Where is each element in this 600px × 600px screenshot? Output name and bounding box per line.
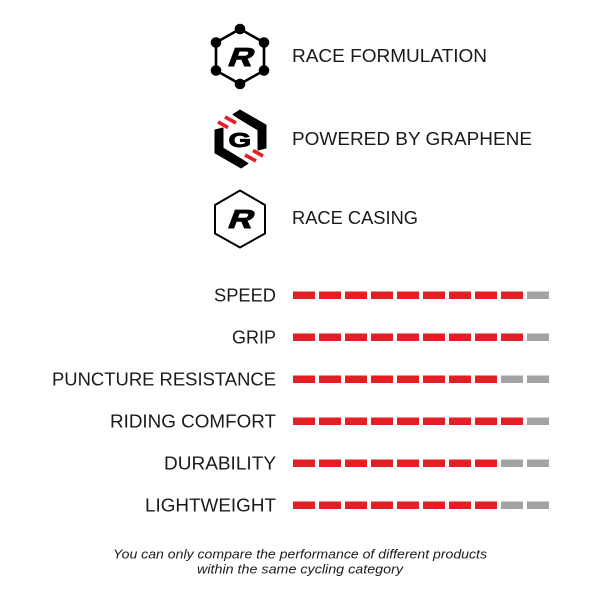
- rating row: speed: [214, 284, 549, 306]
- heading: race casing: RACE CASING: [292, 207, 418, 228]
- icon: race casing: [215, 190, 265, 248]
- icon: powered by graphene: [215, 110, 266, 168]
- rating row: lightweight: [145, 494, 549, 516]
- footnote: within the same cycling category: [197, 562, 405, 576]
- icon: race formulation: [211, 24, 269, 89]
- rating row: riding comfort: [110, 410, 549, 432]
- rating row: riding comfort: RIDING COMFORT: [110, 410, 276, 432]
- rating row: puncture resistance: [52, 368, 549, 390]
- rating row: durability: [164, 452, 549, 474]
- rating row: durability: DURABILITY: [164, 452, 276, 474]
- heading: race formulation: RACE FORMULATION: [292, 45, 487, 66]
- rating row: puncture resistance: PUNCTURE RESISTANCE: [52, 368, 276, 390]
- rating row: grip: GRIP: [232, 326, 276, 348]
- heading: powered by graphene: POWERED BY GRAPHENE: [292, 128, 532, 149]
- icon: race casing: R: [224, 204, 260, 234]
- footnote: You can only compare the performance of different products: [113, 546, 488, 562]
- icon: powered by graphene: G: [228, 129, 251, 152]
- icon: race formulation: R: [224, 42, 260, 72]
- rating row: grip: [232, 326, 549, 348]
- footnote: [113, 546, 488, 576]
- rating row: lightweight: LIGHTWEIGHT: [145, 494, 276, 516]
- rating row: speed: SPEED: [214, 284, 276, 306]
